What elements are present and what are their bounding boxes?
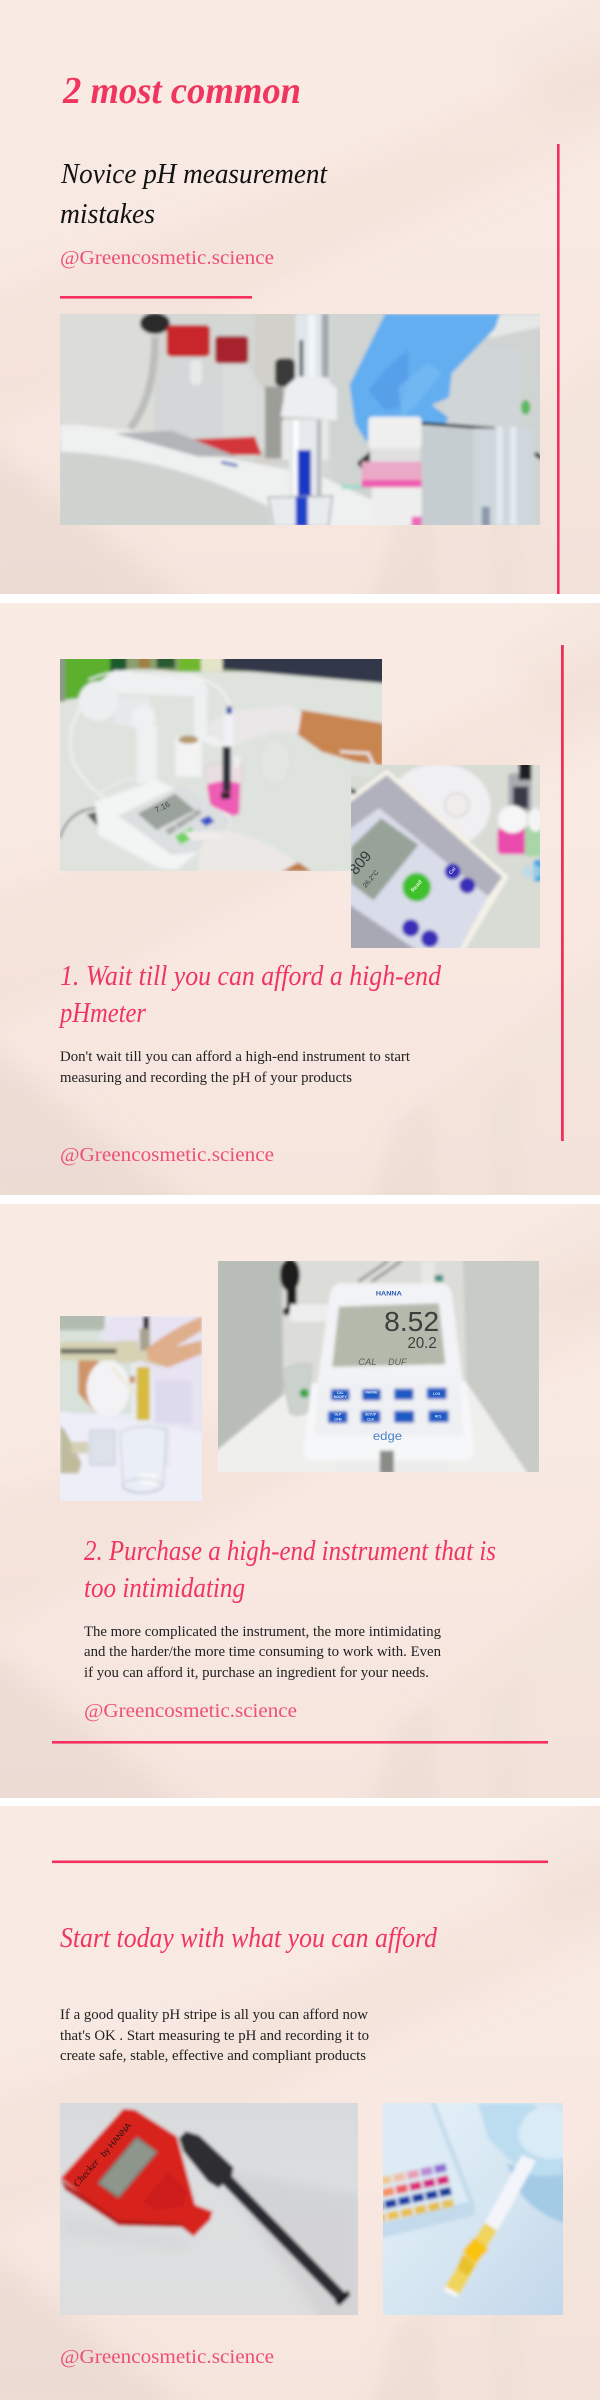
heading: mistake 2: 2. Purchase a high-end instrument that is bbox=[84, 1536, 496, 1567]
heading: start today: Start today with what you can afford bbox=[60, 1923, 438, 1954]
horizontal accent line bbox=[52, 1741, 548, 1744]
body text: conclusion: create safe, stable, effective and compliant products bbox=[60, 2048, 366, 2064]
meter brand, readings and key labels: edge bbox=[373, 1429, 402, 1443]
subtitle: novice pH measurement mistakes: mistakes bbox=[60, 199, 155, 230]
heading: mistake 2 bbox=[84, 1536, 496, 1604]
heading: mistake 1 bbox=[58, 961, 442, 1029]
meter brand, readings and key labels: SETUP bbox=[365, 1412, 377, 1416]
subtitle: novice pH measurement mistakes bbox=[60, 159, 328, 230]
body text: mistake 2: The more complicated the instrument, the more intimidating bbox=[84, 1624, 441, 1640]
subtitle: novice pH measurement mistakes: Novice pH measurement bbox=[60, 159, 328, 190]
body text: mistake 1: measuring and recording the pH of your products bbox=[60, 1070, 352, 1086]
meter reading text: 7.16 bbox=[153, 799, 172, 815]
body text: mistake 2: if you can afford it, purchase an ingredient for your needs. bbox=[84, 1665, 429, 1681]
meter reading and button labels: Read bbox=[410, 879, 424, 894]
meter reading and button labels: Cal bbox=[448, 866, 458, 876]
horizontal accent line bbox=[52, 1860, 548, 1863]
panel: mistake 2 bbox=[0, 1174, 600, 1824]
handle: @Greencosmetic.science bbox=[60, 1144, 274, 1166]
heading: mistake 1: 1. Wait till you can afford a high-end bbox=[60, 961, 442, 992]
meter brand, readings and key labels: 20.2 bbox=[407, 1335, 437, 1352]
photo: HANNA edge benchtop meter reading 8.52 bbox=[218, 1261, 539, 1472]
horizontal accent line bbox=[60, 296, 252, 299]
meter brand, readings and key labels: RANGE bbox=[366, 1390, 378, 1394]
handle: @Greencosmetic.science bbox=[60, 2346, 274, 2368]
meter label text: Checker bbox=[72, 2157, 102, 2189]
meter reading and button labels: 26.2°C bbox=[361, 868, 381, 889]
body text: mistake 1 bbox=[60, 1049, 411, 1086]
meter brand, readings and key labels: DUF bbox=[388, 1357, 408, 1367]
meter brand, readings and key labels: 8.52 bbox=[384, 1306, 439, 1337]
meter reading and button labels: 809 bbox=[346, 848, 375, 878]
meter brand, readings and key labels: LOG bbox=[433, 1392, 441, 1396]
body text: mistake 2: and the harder/the more time consuming to work with. Even bbox=[84, 1644, 441, 1660]
panel: mistake 1 bbox=[0, 573, 600, 1221]
meter brand, readings and key labels bbox=[334, 1291, 442, 1443]
handle: @Greencosmetic.science bbox=[84, 1700, 297, 1722]
meter brand, readings and key labels: GLP bbox=[334, 1413, 342, 1417]
photo: red HANNA Checker pocket pH meter bbox=[60, 2103, 358, 2315]
heading: mistake 1: pHmeter bbox=[58, 998, 146, 1029]
photo: benchtop pH meter with pink sample bbox=[60, 659, 382, 871]
body text: mistake 2 bbox=[84, 1624, 441, 1681]
body text: conclusion: that's OK . Start measuring te pH and recording it to bbox=[60, 2028, 369, 2044]
body text: mistake 1: Don't wait till you can afford a high-end instrument to start bbox=[60, 1049, 411, 1065]
handle: @Greencosmetic.science bbox=[60, 247, 274, 269]
meter label text: by HANNA bbox=[98, 2120, 133, 2159]
photo: lab pH electrode and gloved hand bbox=[60, 314, 540, 525]
meter reading and button labels bbox=[346, 848, 458, 894]
photo: pH test strip and colour chart bbox=[383, 2103, 563, 2315]
panel: title bbox=[0, 0, 600, 620]
photo: probe being rinsed over beaker bbox=[60, 1316, 202, 1501]
meter brand, readings and key labels: MODIFY bbox=[334, 1395, 347, 1399]
heading: mistake 2: too intimidating bbox=[84, 1573, 245, 1604]
body text: conclusion: If a good quality pH stripe is all you can afford now bbox=[60, 2007, 368, 2023]
photo: meter close-up reading 8.09 bbox=[346, 765, 540, 948]
body text: conclusion bbox=[60, 2007, 369, 2064]
meter brand, readings and key labels: RCL bbox=[435, 1415, 442, 1419]
meter brand, readings and key labels: CAL bbox=[337, 1391, 344, 1395]
vertical accent line bbox=[561, 645, 564, 1141]
meter brand, readings and key labels: CAL bbox=[358, 1357, 377, 1367]
vertical accent line bbox=[557, 144, 560, 594]
heading: 2 most common: 2 most common bbox=[62, 70, 301, 112]
meter brand, readings and key labels: HANNA bbox=[376, 1291, 402, 1298]
meter brand, readings and key labels: CLR bbox=[367, 1417, 375, 1421]
meter brand, readings and key labels: CFM bbox=[334, 1417, 342, 1421]
meter label text bbox=[72, 2120, 133, 2189]
panel: conclusion bbox=[0, 1776, 600, 2400]
